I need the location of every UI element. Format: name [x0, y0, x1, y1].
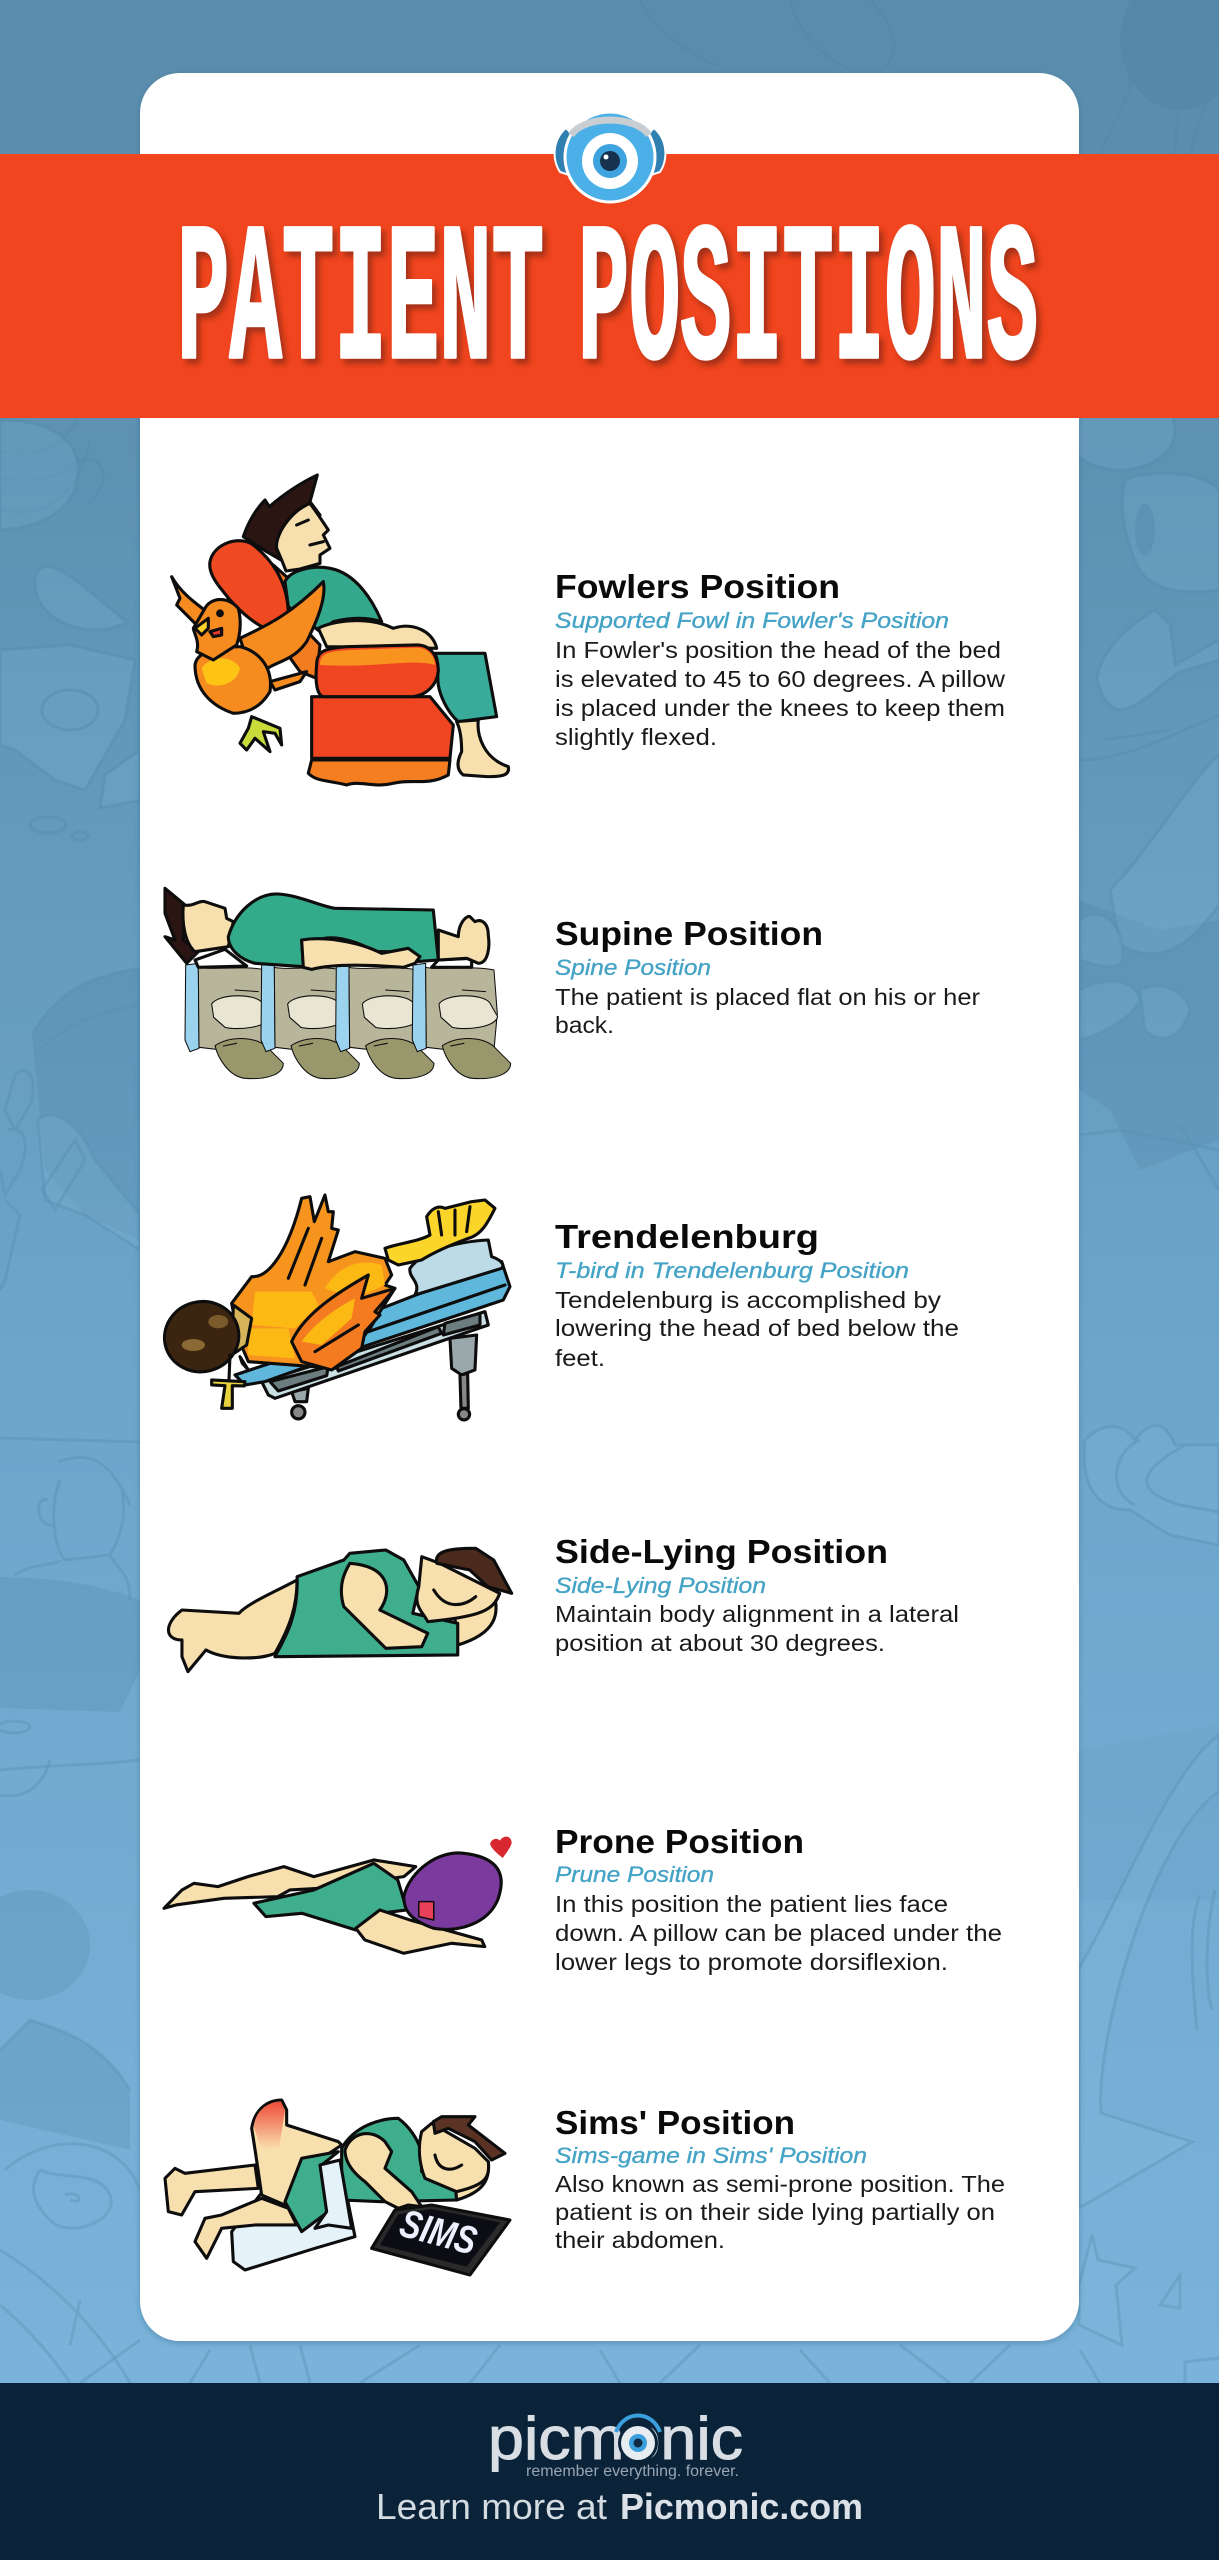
title: PATIENT	[177, 194, 544, 416]
icon: heart	[490, 1837, 512, 1858]
text: Fowlers position: Supported Fowl in Fowler's Position	[555, 608, 949, 633]
red title band	[0, 154, 1219, 418]
text: Sims position: Sims' Position	[555, 2104, 795, 2141]
panel: Fowlers position	[172, 475, 1006, 785]
text: Fowlers position	[555, 568, 1006, 750]
text: Sims position	[555, 2104, 1005, 2253]
text: Prone position: lower legs to promote dorsiflexion.	[555, 1949, 948, 1975]
illustration: patient in Sims position with tablet: SIMS	[395, 2201, 481, 2264]
panel: Side-lying position	[168, 1533, 959, 1672]
illustration: prune-headed patient lying prone	[164, 1837, 512, 1953]
illustration: patient in Sims position with tablet	[165, 2100, 510, 2275]
text: Prone position: Prune Position	[555, 1862, 714, 1887]
text: Prone position: In this position the patient lies face	[555, 1891, 948, 1917]
text: Trendelenburg: feet.	[555, 1345, 605, 1371]
picmonic logo: remember everything. forever.	[526, 2463, 739, 2480]
picmonic logo: picmonic	[488, 2405, 743, 2472]
illustration: patient lying on side	[168, 1548, 512, 1672]
text: Prone position: Prone Position	[555, 1823, 804, 1860]
text: Trendelenburg: Tendelenburg is accomplished by	[555, 1287, 941, 1313]
text: Fowlers position: is placed under the knees to keep them	[555, 695, 1005, 721]
panel: Prone position	[164, 1823, 1002, 1975]
text: Side-lying position: Side-Lying Position	[555, 1573, 766, 1598]
panel: Sims position	[165, 2100, 1005, 2275]
text: Trendelenburg	[555, 1218, 959, 1371]
text: Supine position: The patient is placed flat on his or her	[555, 984, 980, 1010]
text: Supine position	[555, 915, 980, 1038]
text: Prone position	[555, 1823, 1002, 1975]
text: Side-lying position: position at about 30 degrees.	[555, 1630, 885, 1656]
icon: eye with headphones	[555, 112, 665, 202]
text: Supine position: back.	[555, 1012, 614, 1038]
text: Trendelenburg: Trendelenburg	[555, 1218, 819, 1255]
call to action: Learn more at	[376, 2486, 607, 2527]
panel: Trendelenburg	[157, 1195, 959, 1420]
text: Trendelenburg: T-bird in Trendelenburg Position	[555, 1258, 909, 1283]
text: Fowlers position: slightly flexed.	[555, 724, 717, 750]
illustration: patient in chair with chicken	[172, 475, 509, 785]
illustration: patient lying on spine vertebrae	[165, 888, 511, 1079]
text: Supine position: Spine Position	[555, 955, 711, 980]
text: Fowlers position: is elevated to 45 to 60 degrees. A pillow	[555, 666, 1006, 692]
text: Side-lying position	[555, 1533, 959, 1656]
white card panel	[140, 73, 1079, 2341]
text: Sims position: patient is on their side lying partially on	[555, 2199, 995, 2225]
text: Trendelenburg: lowering the head of bed below the	[555, 1315, 959, 1341]
text: Sims position: Sims-game in Sims' Position	[555, 2143, 867, 2168]
call to action	[376, 2486, 863, 2527]
text: Fowlers position: In Fowler's position the head of the bed	[555, 637, 1001, 663]
text: Sims position: their abdomen.	[555, 2227, 725, 2253]
illustration: T-bird on tilted bed	[157, 1195, 510, 1420]
call to action: Picmonic.com	[620, 2486, 863, 2527]
text: Supine position: Supine Position	[555, 915, 823, 952]
panel: Supine position	[165, 888, 980, 1079]
footer bar	[0, 2383, 1219, 2560]
text: Side-lying position: Maintain body alignment in a lateral	[555, 1601, 959, 1627]
text: Prone position: down. A pillow can be placed under the	[555, 1920, 1002, 1946]
text: Sims position: Also known as semi-prone position. The	[555, 2171, 1005, 2197]
text: Fowlers position: Fowlers Position	[555, 568, 840, 605]
text: Side-lying position: Side-Lying Position	[555, 1533, 888, 1570]
